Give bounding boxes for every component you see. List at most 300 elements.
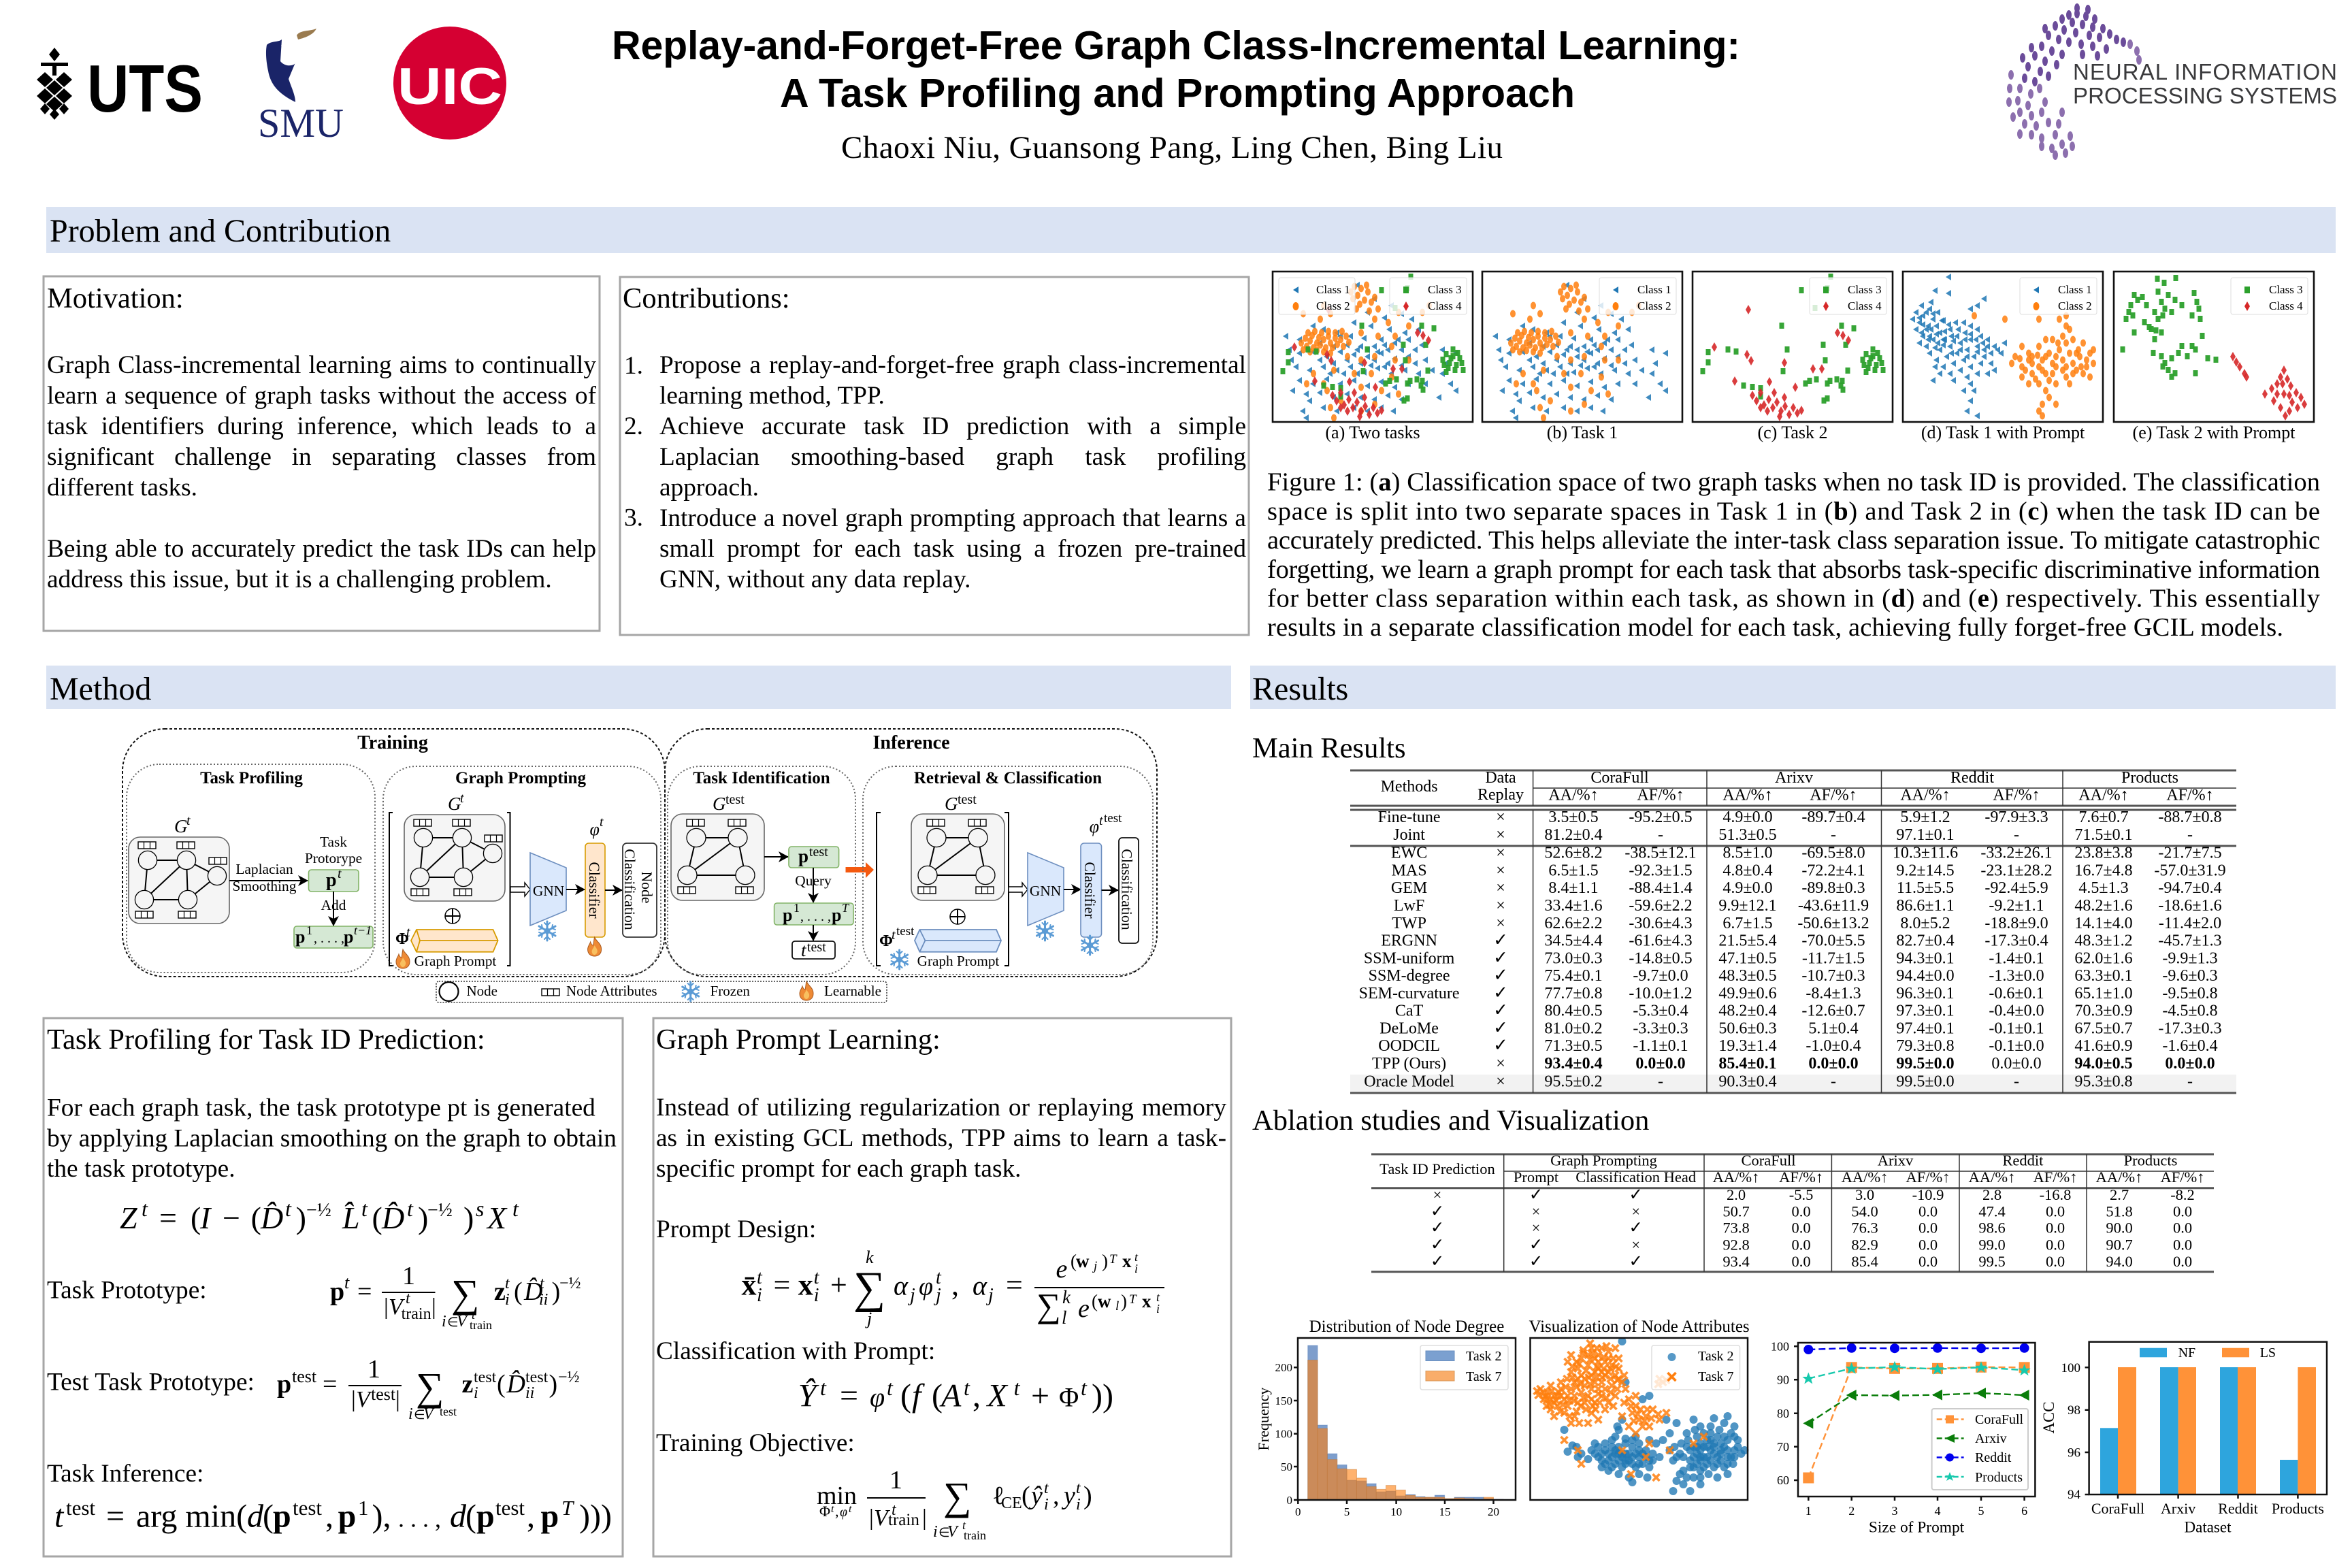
chart: distribution of node degree: 100 — [1275, 1428, 1292, 1440]
equation: classification: X — [985, 1378, 1009, 1414]
table rows: ✓ — [1431, 1235, 1444, 1254]
table rows: 82.7±0.4 — [1896, 932, 1955, 950]
table rows: -0.6±0.1 — [1989, 985, 2044, 1002]
table rows: × — [1496, 879, 1505, 897]
equation: training objective: ℓ — [992, 1482, 1004, 1510]
equation: test task prototype: test — [525, 1369, 549, 1386]
text block: motivation body: learn a sequence of graph tasks without the access of — [47, 382, 596, 410]
chart: distribution of node degree: 5 — [1344, 1505, 1350, 1518]
equation: task inference: p — [273, 1499, 291, 1535]
text block — [656, 1092, 1226, 1187]
equation: classification: φ — [870, 1382, 885, 1413]
equation: task prototype: t — [540, 1275, 545, 1292]
table rows: × — [1532, 1220, 1540, 1237]
table rows: 50.7 — [1722, 1203, 1750, 1220]
scatter (c) task 2: Class 4 — [1848, 299, 1882, 312]
task profiling module: Smoothing — [233, 878, 297, 894]
table rows: 33.4±1.6 — [1544, 897, 1603, 915]
logo: SMU: SMU — [258, 101, 344, 146]
chart: distribution of node degree: Distribution of Node Degree — [1309, 1318, 1504, 1336]
equation: classification: = — [840, 1378, 858, 1414]
table rows: -17.3±0.4 — [1984, 932, 2048, 950]
table rows: -94.7±0.4 — [2158, 879, 2222, 897]
table rows — [1431, 1184, 2195, 1271]
retrieval and classification module: Φ — [879, 932, 893, 950]
equation: training objective: t — [1044, 1480, 1049, 1497]
chart: distribution of node degree: 50 — [1281, 1460, 1292, 1473]
table rows: 4.8±0.4 — [1722, 862, 1773, 879]
equation: training objective: t — [962, 1518, 966, 1532]
table rows: TWP — [1392, 915, 1426, 932]
chart: distribution of node degree: Frequency — [1255, 1388, 1272, 1450]
chart: size of prompt line plot: 5 — [1978, 1504, 1984, 1518]
equation: task prototype: t — [472, 1308, 476, 1322]
equation: task prototype: V — [457, 1313, 468, 1330]
table rows: -9.7±0.0 — [1633, 967, 1688, 985]
figure caption: space is split into two separate spaces in Task 1 in (b) and Task 2 in (c) when the task ID can be — [1267, 497, 2320, 525]
equation: task inference: 1 — [358, 1496, 369, 1520]
equation: test task prototype: ∑ — [416, 1365, 444, 1409]
equation: Z: t — [407, 1196, 414, 1221]
task profiling module: , . . . , — [314, 931, 344, 946]
section header: Results — [1250, 666, 2336, 709]
equation: task prototype: i — [505, 1291, 510, 1309]
table rows: -88.7±0.8 — [2158, 808, 2222, 826]
equation: Z: ( — [251, 1200, 261, 1235]
table rows: 14.1±4.0 — [2074, 915, 2133, 932]
table rows: -21.7±7.5 — [2158, 845, 2222, 862]
table rows: Fine-tune — [1378, 808, 1441, 826]
equation: test task prototype — [277, 1355, 580, 1423]
chart: size of prompt line plot: 100 — [1771, 1339, 1789, 1353]
equation: task prototype: t — [505, 1275, 510, 1292]
equation: classification: t — [820, 1375, 827, 1400]
text block: For each graph task, the task prototype pt is generated — [47, 1094, 595, 1122]
equation: prompt design: α — [973, 1270, 987, 1301]
table rows: -43.6±11.9 — [1798, 897, 1869, 915]
table rows: -95.2±0.5 — [1629, 808, 1693, 826]
table rows — [1359, 808, 2226, 1090]
table rows: -59.6±2.2 — [1629, 897, 1693, 915]
table rows: 48.3±1.2 — [2074, 932, 2133, 950]
table rows: 0.0 — [2046, 1203, 2065, 1220]
figure caption: Figure 1: (a) Classification space of two graph tasks when no task ID is provided. The classification — [1267, 468, 2320, 497]
table rows: -72.2±4.1 — [1801, 862, 1865, 879]
scatter (a) two tasks: Class 1 — [1316, 283, 1350, 296]
table rows: × — [1631, 1203, 1640, 1220]
equation: training objective: Φ — [819, 1503, 830, 1520]
equation: prompt design: j — [986, 1285, 994, 1306]
chart: size of prompt line plot: CoraFull — [1975, 1412, 2024, 1427]
table rows: GEM — [1391, 879, 1427, 897]
table rows: ✓ — [1493, 930, 1508, 950]
table rows: 62.0±1.6 — [2074, 949, 2133, 967]
equation: task inference: ( — [466, 1499, 476, 1535]
label: task prototype: Task Prototype: — [47, 1277, 207, 1305]
retrieval and classification module: test — [958, 792, 977, 807]
equation: task prototype: V — [389, 1294, 406, 1320]
equation: prompt design: α — [894, 1270, 909, 1301]
equation: prompt design: φ — [919, 1273, 933, 1301]
table rows: 51.8 — [2106, 1203, 2133, 1220]
chart: NF vs LS bar chart: ACC — [2040, 1402, 2057, 1433]
equation: Z: ( — [191, 1200, 201, 1235]
table rows: -89.7±0.4 — [1801, 808, 1865, 826]
table rows: 0.0±0.0 — [2165, 1055, 2215, 1073]
inference container: Inference — [872, 732, 950, 753]
table rows: -5.5 — [1789, 1186, 1813, 1203]
text block: motivation body: address this issue, but it is a challenging problem. — [47, 566, 552, 593]
table rows: -45.7±1.3 — [2158, 932, 2222, 950]
text block: specific prompt for each graph task. — [656, 1154, 1021, 1183]
equation: task inference: , — [527, 1499, 535, 1535]
table rows: - — [2187, 1073, 2193, 1090]
chart: distribution of node degree: 15 — [1439, 1505, 1451, 1518]
equation: task inference: d — [450, 1499, 467, 1535]
chart: visualization of node attributes: Visualization of Node Attributes — [1529, 1318, 1750, 1336]
table rows: 62.6±2.2 — [1544, 915, 1603, 932]
chart: size of prompt line plot: 2 — [1848, 1504, 1855, 1518]
table rows: 52.6±8.2 — [1544, 845, 1603, 862]
equation: training objective: ( — [1022, 1482, 1030, 1510]
table rows: 3.5±0.5 — [1548, 808, 1599, 826]
table rows: -69.5±8.0 — [1801, 845, 1865, 862]
table rows: -92.3±1.5 — [1629, 862, 1693, 879]
equation: task inference: = — [106, 1499, 125, 1535]
list: contributions: Achieve accurate task ID prediction with a simple — [659, 412, 1246, 440]
graph prompting module: Φ — [395, 930, 409, 948]
table rows: 0.0 — [2173, 1237, 2192, 1254]
table header: AF/%↑ — [1993, 787, 2040, 804]
chart: distribution of node degree: 20 — [1488, 1505, 1499, 1518]
task profiling module: Add — [321, 897, 346, 913]
table header: Arixv — [1775, 769, 1813, 787]
table rows: -10.0±1.2 — [1629, 985, 1693, 1002]
table rows: -17.3±0.3 — [2158, 1019, 2222, 1037]
retrieval and classification module: t — [1099, 813, 1103, 828]
scatter (e) task 2 with prompt: Class 3 — [2269, 283, 2303, 296]
table rows: 0.0 — [2173, 1220, 2192, 1237]
equation: classification: t — [964, 1375, 970, 1400]
equation: Z: − — [223, 1200, 240, 1235]
retrieval and classification module: Retrieval & Classification — [914, 769, 1102, 787]
equation: test task prototype: ii — [525, 1384, 534, 1402]
table rows: 90.0 — [2106, 1220, 2133, 1237]
equation: test task prototype: = — [323, 1370, 337, 1399]
table rows: 50.6±0.3 — [1718, 1019, 1777, 1037]
table header: AA/%↑ — [2096, 1169, 2142, 1186]
chart: distribution of node degree: 150 — [1275, 1394, 1292, 1407]
chart: distribution of node degree: Task 7 — [1466, 1369, 1501, 1384]
list: contributions: Laplacian smoothing-based graph task profiling — [659, 443, 1246, 471]
text block: motivation body: significant challenge in separating classes from — [47, 443, 596, 471]
task identification module: T — [842, 901, 850, 915]
equation: classification: t — [1014, 1375, 1021, 1400]
figure caption: forgetting, we learn a graph prompt for each task that absorbs task-specific discriminative information — [1267, 555, 2320, 584]
table rows: OODCIL — [1378, 1037, 1440, 1055]
table rows: 98.6 — [1978, 1220, 2006, 1237]
table rows: 76.3 — [1851, 1220, 1878, 1237]
equation: prompt design: w — [1076, 1251, 1090, 1271]
equation: test task prototype: test — [474, 1369, 497, 1386]
scatter (e) task 2 with prompt: Class 4 — [2269, 299, 2303, 312]
table header: AF/%↑ — [1637, 787, 1684, 804]
retrieval and classification module: φ — [1090, 817, 1099, 836]
table rows: -33.2±26.1 — [1980, 845, 2053, 862]
equation: prompt design: e — [1056, 1255, 1067, 1284]
table rows: 47.4 — [1978, 1203, 2006, 1220]
table rows: - — [2187, 826, 2193, 844]
equation: classification: f — [912, 1378, 925, 1414]
task profiling module: p — [326, 870, 337, 891]
table header: AA/%↑ — [1548, 787, 1599, 804]
table rows: 71.5±0.1 — [2074, 826, 2133, 844]
table rows: SEM-curvature — [1359, 985, 1460, 1002]
table rows: -9.2±1.1 — [1989, 897, 2044, 915]
equation: Z: D̂ — [381, 1200, 404, 1235]
table rows: -0.1±0.0 — [1989, 1037, 2044, 1055]
table header: Replay — [1477, 786, 1524, 804]
table rows: × — [1532, 1203, 1540, 1220]
table header: AA/%↑ — [1722, 787, 1773, 804]
table rows: -3.3±0.3 — [1633, 1019, 1688, 1037]
table rows: -10.7±0.3 — [1801, 967, 1865, 985]
table rows: - — [1831, 1073, 1836, 1090]
table rows: ✓ — [1493, 1000, 1508, 1021]
table rows: 8.4±1.1 — [1548, 879, 1599, 897]
graph prompting module: Graph Prompting — [455, 769, 586, 787]
equation: training objective: t — [849, 1503, 852, 1515]
table rows: 94.3±0.1 — [1896, 949, 1955, 967]
task profiling module: t−1 — [354, 924, 372, 937]
text block — [47, 1094, 617, 1183]
table rows: -16.8 — [2040, 1186, 2071, 1203]
chart: NF vs LS bar chart: Reddit — [2218, 1500, 2258, 1517]
table rows: 0.0 — [2173, 1203, 2192, 1220]
equation: test task prototype: ∈ — [414, 1408, 425, 1422]
table rows: × — [1496, 862, 1505, 879]
chart: size of prompt line plot: 90 — [1777, 1373, 1789, 1387]
table rows: DeLoMe — [1379, 1019, 1439, 1037]
table header: Products — [2124, 1152, 2177, 1169]
legend: Node Attributes — [566, 983, 657, 999]
table rows: MAS — [1392, 862, 1427, 879]
equation: Z: L̂ — [342, 1200, 360, 1235]
equation: prompt design: j — [1092, 1259, 1097, 1273]
chart: distribution of node degree: 0 — [1286, 1494, 1292, 1507]
equation: task prototype: p — [330, 1277, 344, 1306]
equation: training objective: V — [947, 1523, 959, 1541]
scatter (d) task 1 with prompt — [1903, 272, 2103, 442]
text block: Instead of utilizing regularization or replaying memory — [656, 1093, 1226, 1122]
table header — [1379, 1152, 2205, 1186]
graph prompting module — [383, 766, 661, 975]
equation: Z: Z — [120, 1200, 137, 1235]
equation: test task prototype: | — [395, 1387, 400, 1412]
list: contributions: small prompt for each task using a frozen pre-trained — [659, 535, 1246, 563]
table rows: 99.5±0.0 — [1896, 1055, 1955, 1073]
table rows: SSM-degree — [1369, 967, 1450, 985]
figure caption — [1267, 468, 2321, 642]
graph prompting module: φ — [589, 819, 600, 839]
graph prompting module: Classifier — [586, 862, 602, 919]
equation: test task prototype: i — [408, 1405, 413, 1423]
table rows: ✓ — [1431, 1251, 1444, 1271]
table rows: 0.0±0.0 — [1808, 1055, 1859, 1073]
equation: training objective: | — [922, 1505, 927, 1531]
table rows: × — [1496, 826, 1505, 844]
list: contributions: 1. — [624, 352, 643, 380]
retrieval and classification module: Classification — [1119, 849, 1135, 930]
equation: prompt design: j — [908, 1285, 915, 1306]
table rows: 11.5±5.5 — [1897, 879, 1954, 897]
graph prompting module: G — [448, 794, 461, 814]
table rows: 0.0 — [1918, 1237, 1938, 1254]
table rows: -1.4±0.1 — [1989, 949, 2044, 967]
table rows: SSM-uniform — [1364, 949, 1455, 967]
equation: training objective: min — [817, 1482, 857, 1510]
table rows: × — [1496, 1073, 1505, 1090]
equation: task inference: test — [293, 1496, 322, 1520]
table rows: × — [1496, 1055, 1505, 1073]
equation: prompt design: x — [798, 1269, 813, 1301]
table rows: 0.0 — [1792, 1203, 1811, 1220]
equation: test task prototype: z — [461, 1370, 474, 1399]
table: ablation studies — [1371, 1152, 2214, 1272]
task identification module: Task Identification — [693, 769, 830, 787]
equation: prompt design: t — [1156, 1290, 1160, 1304]
equation: task inference: arg min( — [136, 1499, 247, 1535]
chart: NF vs LS bar chart: 98 — [2068, 1403, 2080, 1418]
equation: test task prototype: test — [371, 1384, 396, 1404]
equation: training objective: i — [933, 1523, 938, 1541]
table rows: 0.0 — [1918, 1203, 1938, 1220]
chart: NF vs LS bar chart: LS — [2260, 1345, 2276, 1360]
table rows: 54.0 — [1851, 1203, 1878, 1220]
equation: task prototype: ( — [514, 1277, 523, 1306]
table rows: - — [1658, 826, 1663, 844]
table rows: 0.0 — [2046, 1220, 2065, 1237]
table header: AA/%↑ — [2078, 787, 2129, 804]
panel: contributions — [620, 277, 1249, 635]
table rows: -88.4±1.4 — [1629, 879, 1693, 897]
logo: UTS — [37, 48, 203, 126]
table rows: -11.4±2.0 — [2159, 915, 2221, 932]
equation: prompt design: k — [866, 1247, 874, 1267]
table header: Products — [2121, 769, 2178, 787]
scatter (a) two tasks: Class 4 — [1428, 299, 1462, 312]
table rows: 9.2±14.5 — [1896, 862, 1955, 879]
logo: NeurIPS — [2009, 8, 2337, 155]
graph prompting module: GNN — [533, 883, 564, 899]
table rows: 90.7 — [2106, 1237, 2133, 1254]
table rows: 19.3±1.4 — [1718, 1037, 1777, 1055]
equation: Z: s — [476, 1196, 484, 1221]
chart: visualization of node attributes: Task 7 — [1698, 1369, 1733, 1384]
table rows: -9.9±1.3 — [2162, 949, 2218, 967]
equation: prompt design: t — [757, 1267, 763, 1288]
text block: as in existing GCL methods, TPP aims to learn a task- — [656, 1124, 1226, 1152]
table rows: 9.9±12.1 — [1718, 897, 1777, 915]
graph prompting module: t — [600, 815, 604, 830]
table header: AF/%↑ — [1906, 1169, 1950, 1186]
table rows: 0.0 — [2046, 1237, 2065, 1254]
equation: task prototype: | — [384, 1294, 389, 1320]
retrieval and classification module: GNN — [1030, 883, 1061, 899]
table rows: 85.4 — [1851, 1253, 1878, 1270]
equation: classification: t — [1081, 1375, 1088, 1400]
table rows: 93.4±0.4 — [1544, 1055, 1603, 1073]
list: contributions: learning method, TPP. — [659, 382, 885, 410]
equation: Z: = — [159, 1200, 177, 1235]
equation: Z: ) — [418, 1200, 428, 1235]
training container — [122, 729, 665, 977]
retrieval and classification module: t — [892, 928, 896, 943]
equation: prompt design: i — [1156, 1302, 1160, 1316]
equation: training objective: ŷ — [1028, 1482, 1043, 1510]
equation: task prototype: ∑ — [451, 1271, 479, 1316]
equation: prompt design: = — [773, 1269, 790, 1301]
table rows: 0.0 — [2046, 1253, 2065, 1270]
chart: size of prompt line plot: 6 — [2021, 1504, 2027, 1518]
table rows: - — [1658, 1073, 1663, 1090]
table rows: 86.6±1.1 — [1896, 897, 1955, 915]
equation: task prototype: ∈ — [447, 1316, 459, 1330]
table rows: 99.5±0.0 — [1896, 1073, 1955, 1090]
table rows: -23.1±28.2 — [1980, 862, 2053, 879]
table rows: -9.5±0.8 — [2162, 985, 2218, 1002]
equation: prompt design: t — [936, 1267, 942, 1288]
table rows: ✓ — [1431, 1201, 1444, 1221]
inference container — [665, 729, 1157, 977]
equation: prompt design: T — [1129, 1292, 1137, 1307]
task profiling module: G — [174, 816, 188, 836]
table rows: - — [2014, 826, 2019, 844]
chart: size of prompt line plot: Reddit — [1975, 1450, 2012, 1465]
label: task inference: Task Inference: — [47, 1460, 203, 1488]
section header: Method: Method — [50, 671, 151, 707]
table rows: 0.0±0.0 — [1635, 1055, 1686, 1073]
equation: prompt design — [742, 1247, 1164, 1328]
equation: training objective: ) — [1083, 1482, 1092, 1510]
table rows: -1.6±0.4 — [2162, 1037, 2218, 1055]
equation: prompt design: i — [1134, 1262, 1138, 1275]
table rows: 70.3±0.9 — [2074, 1002, 2133, 1020]
table rows: 16.7±4.8 — [2074, 862, 2133, 879]
table rows: 0.0 — [1918, 1220, 1938, 1237]
table rows: ✓ — [1629, 1218, 1643, 1237]
task profiling module: 1 — [306, 924, 312, 937]
table rows: 48.2±1.6 — [2074, 897, 2133, 915]
table rows: -1.1±0.1 — [1633, 1037, 1688, 1055]
equation: test task prototype: D̂ — [506, 1370, 525, 1399]
table rows: -18.6±1.6 — [2158, 897, 2222, 915]
heading: motivation: Motivation: — [47, 282, 184, 314]
equation: test task prototype: test — [440, 1405, 457, 1418]
scatter (b) task 1 — [1482, 272, 1682, 442]
equation: classification: ( — [932, 1378, 943, 1414]
equation: prompt design: w — [1098, 1291, 1111, 1311]
text block: motivation body: different tasks. — [47, 474, 197, 502]
equation: classification: A — [939, 1378, 962, 1414]
table rows: 67.5±0.7 — [2074, 1019, 2133, 1037]
table rows: 4.5±1.3 — [2078, 879, 2129, 897]
equation: prompt design: t — [1134, 1250, 1139, 1264]
chart: visualization of node attributes: Task 2 — [1698, 1349, 1733, 1364]
scatter (d) task 1 with prompt: Class 1 — [2058, 283, 2092, 296]
list: contributions: 2. — [624, 412, 643, 440]
equation: task inference: T — [561, 1496, 575, 1520]
